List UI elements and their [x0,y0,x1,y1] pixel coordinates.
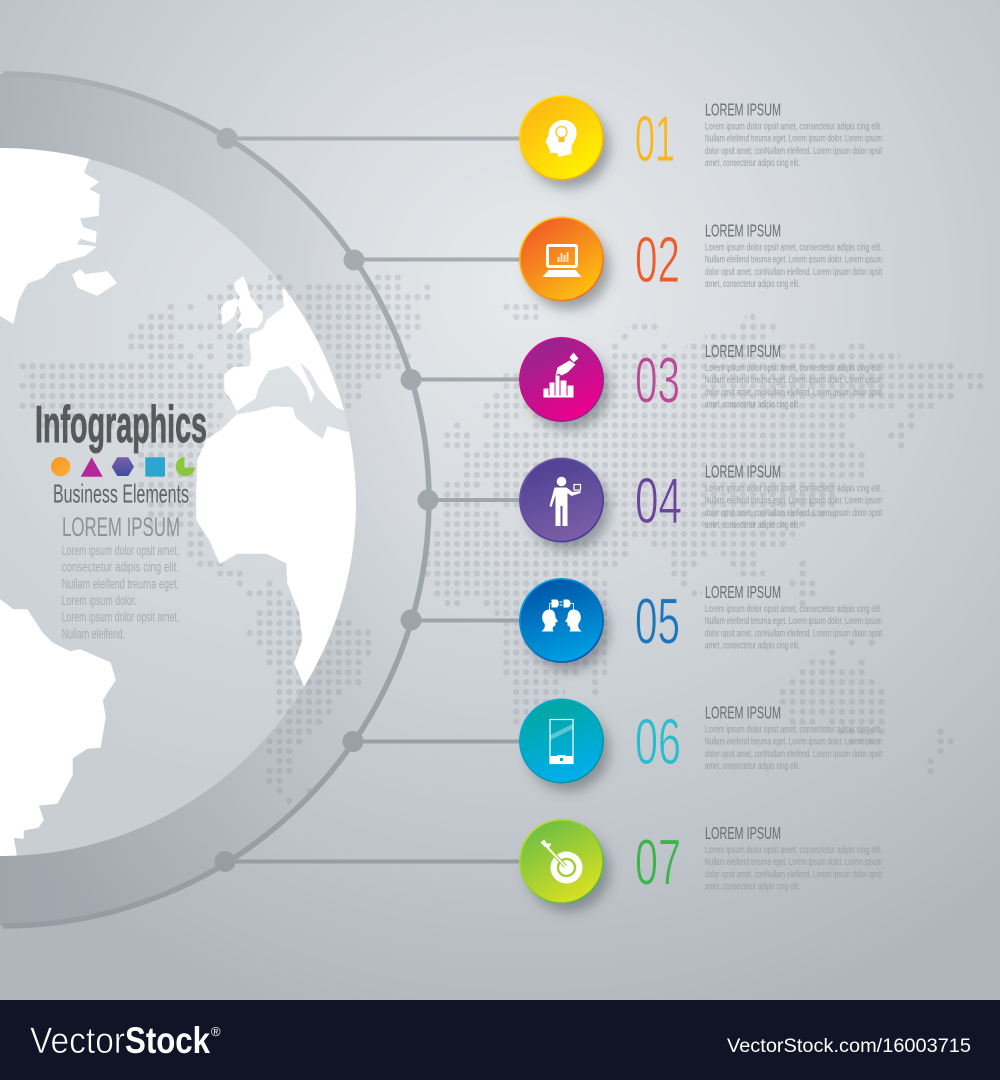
globe disc [0,148,356,856]
text block: Lorem ipsum dolor opsit amet, consectetur adipis cing elit. [705,242,882,254]
continent: Africa [196,406,356,686]
text block [705,461,882,531]
text block: Nullam eleifend treuma eget. Lorem ipsum dolor. Lorem ipsum [705,255,882,266]
connector 7 [214,851,525,872]
badge with icon: computer [519,216,610,309]
text block: Nullam eleifend treuma eget. Lorem ipsum dolor. Lorem ipsum [705,857,882,868]
connector 2 [344,250,529,270]
subtitle: Business Elements [53,479,189,509]
text block: Lorem ipsum dolor opsit amet, consectetur adipis cing elit. [705,724,882,736]
text block: Nullam eleifend treuma eget. Lorem ipsum dolor. Lorem ipsum [705,134,882,145]
island: Britain [235,277,262,332]
connector 5 [400,610,529,630]
text block: dolor opsit amet, conNullam eleifend. Lorem ipsum dolor opsit [705,508,882,519]
text block: amet, consectetur adipis cing elit. [705,761,800,772]
text block: Lorem ipsum dolor opsit amet, consectetur adipis cing elit. [705,604,882,615]
island: Ireland [222,299,237,324]
text block [705,220,882,290]
icon: purple hexagon [112,457,134,476]
number: 07 [635,826,681,898]
number: 01 [635,102,675,175]
footer logo: Vector [30,1020,125,1061]
continent: Greenland and North America [0,140,99,323]
body text: Nullam eleifend treurna eget. [62,576,179,591]
icon: orange circle [51,457,70,476]
text block [705,582,882,652]
badge with icon: smartphone [519,698,610,791]
island: Iceland [73,270,116,295]
badge with icon: two heads connected by plug [519,578,610,670]
text block [705,99,882,169]
number: 05 [635,584,680,658]
footer logo: Stock [125,1020,210,1061]
text block: Nullam eleifend treuma eget. Lorem ipsum dolor. Lorem ipsum [705,616,882,627]
icon: green pie [176,457,195,476]
step 04 [519,458,882,550]
icon: blue square [145,457,165,477]
body text [62,543,179,641]
text block [705,702,882,772]
text block: amet, consectetur adipis cing elit. [705,279,800,290]
text block: dolor opsit amet, conNullam eleifend. Lorem ipsum dolor opsit [705,267,882,278]
text block [705,341,882,410]
badge with icon: head with lightbulb [519,96,610,188]
badge with icon: person with laptop [519,458,610,550]
connector 4 [418,490,528,510]
text block: amet, consectetur adipis cing elit. [705,400,800,410]
text block: dolor opsit amet, conNullam eleifend. Lorem ipsum dolor opsit [705,749,882,760]
text block: dolor opsit amet, conNullam eleifend. Lorem ipsum dolor opsit [705,146,882,157]
badge with icon: hand on bar chart [519,337,610,430]
footer bar [0,1000,1000,1080]
step 06 [519,698,882,791]
step 07 [519,819,882,912]
text block: Nullam eleifend treuma eget. Lorem ipsum dolor. Lorem ipsum [705,496,882,507]
globe continents [0,148,356,856]
text block: LOREM IPSUM [705,220,781,240]
text block: LOREM IPSUM [705,341,781,361]
heading: LOREM IPSUM [62,512,180,542]
connector lines and nodes [214,128,529,872]
number: 02 [635,223,680,296]
text block: dolor opsit amet, conNullam eleifend. Lorem ipsum dolor opsit [705,628,882,640]
step 05 [519,578,882,670]
footer logo: ® [211,1024,221,1039]
body text: Lorem ipsum dolor. [62,593,137,608]
connector 3 [400,369,529,390]
title: Infographics [35,396,207,454]
text block: Nullam eleifend treuma eget. Lorem ipsum dolor. Lorem ipsum [705,737,882,748]
text block: Lorem ipsum dolor opsit amet, consectetur adipis cing elit. [705,484,882,494]
number: 06 [635,705,681,778]
icon: magenta triangle [81,457,103,477]
text block: dolor opsit amet, conNullam eleifend. Lorem ipsum dolor opsit [705,388,882,398]
text block: LOREM IPSUM [705,461,781,481]
body text: consectetur adipis cing elit. [62,560,179,575]
text block: amet, consectetur adipis cing elit. [705,640,800,652]
step 01 [519,96,882,188]
dotted world map [19,277,987,801]
text block: LOREM IPSUM [705,702,781,722]
text block: amet, consectetur adipis cing elit. [705,158,800,169]
orbit arc [3,74,429,926]
text block: dolor opsit amet, conNullam eleifend. Lorem ipsum dolor opsit [705,870,882,880]
island: Canaries [224,443,228,451]
text block: Lorem ipsum dolor opsit amet, consectetur adipis cing elit. [705,363,882,374]
body text: Lorem ipsum dolor opsit amet, [62,610,179,625]
text block: Lorem ipsum dolor opsit amet, consectetur adipis cing elit. [705,845,882,856]
footer image id: VectorStock.com/16003715 [727,1035,971,1057]
connector 6 [342,731,528,752]
text block: amet, consectetur adipis cing elit. [705,882,800,892]
body text: Lorem ipsum dolor opsit amet, [62,543,179,558]
text block: amet, consectetur adipis cing elit. [705,520,800,531]
number: 03 [635,344,680,416]
badge with icon: target with arrow [519,819,610,912]
text block: LOREM IPSUM [705,582,781,602]
text block [705,823,882,892]
text block: Nullam eleifend treuma eget. Lorem ipsum dolor. Lorem ipsum [705,375,882,386]
text block: Lorem ipsum dolor opsit amet, consectetur adipis cing elit. [705,122,882,132]
panel: left title block [35,396,207,641]
orbit band [0,74,429,926]
continent: Europe [224,289,344,411]
connector 1 [216,128,527,149]
text block: LOREM IPSUM [705,823,781,843]
continent: South America [0,600,115,856]
step 03 [519,337,882,430]
step 02 [519,216,882,309]
body text: Nullam eleifend. [62,626,125,641]
number: 04 [635,464,682,537]
footer logo [30,1020,221,1061]
text block: LOREM IPSUM [705,99,781,119]
